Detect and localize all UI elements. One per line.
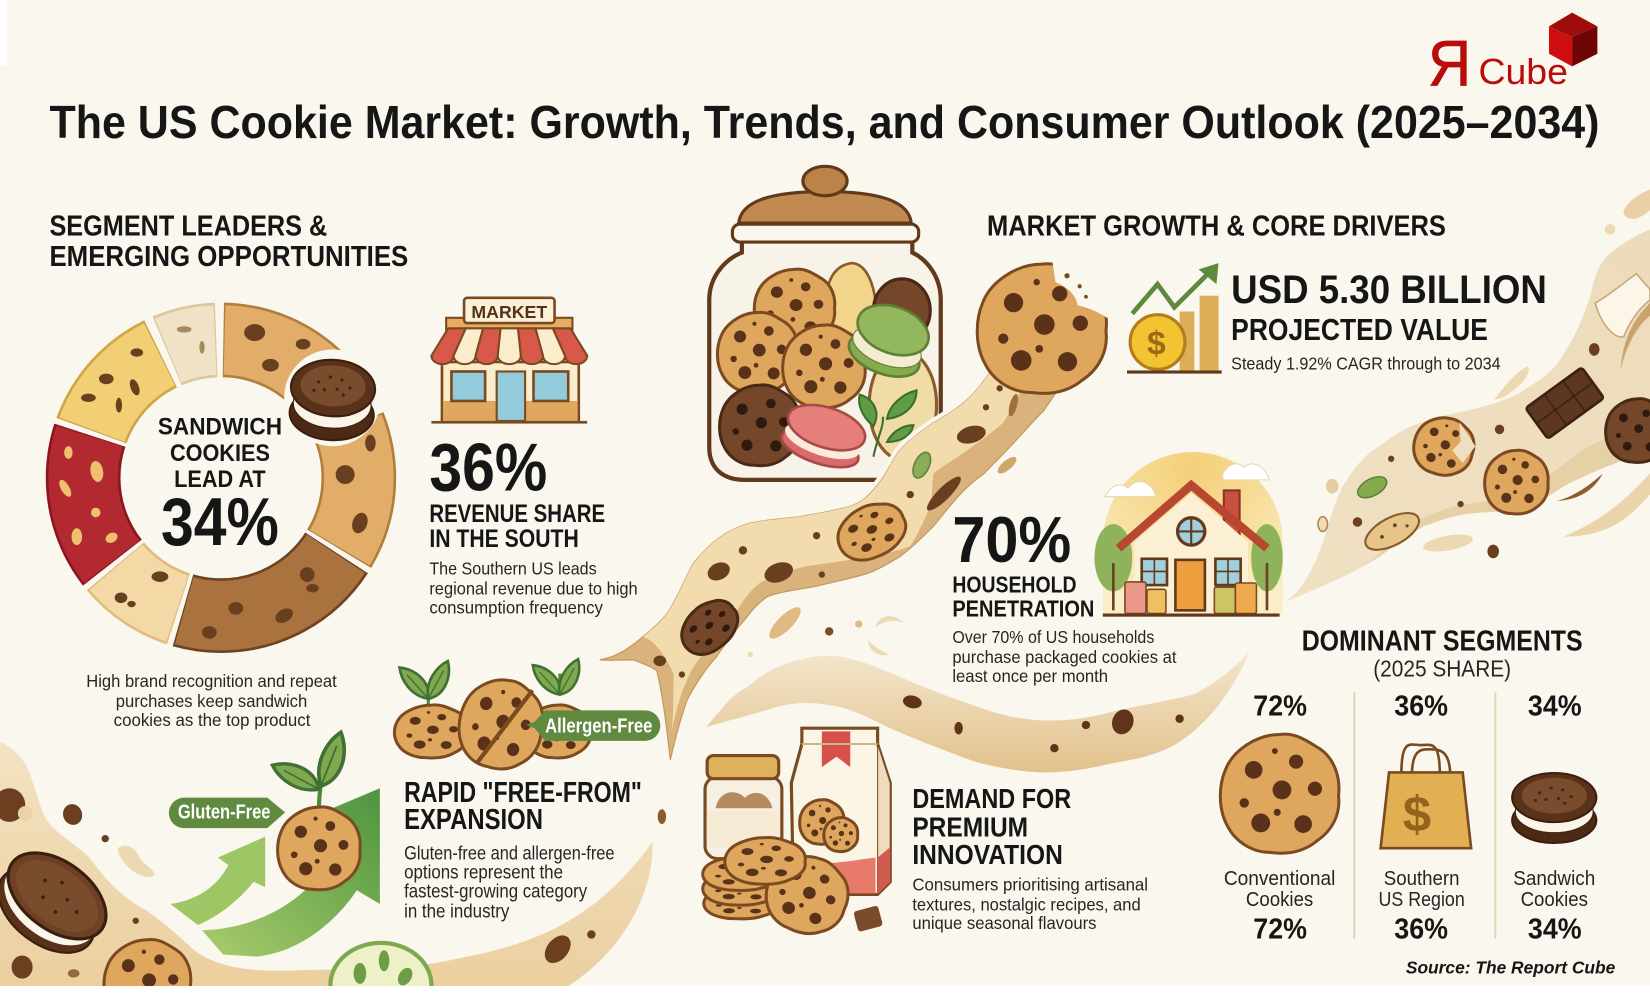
source note: Source: The Report Cube [1406,957,1615,977]
stat: 36 percent revenue share: The Southern US leads [429,559,597,579]
sprout [272,732,361,831]
text: premium innovation: DEMAND FOR [912,783,1071,814]
text: free-from expansion: options represent the [404,863,563,884]
icon: growth chart with coin: $ [1147,326,1166,363]
cookie in stream [829,494,914,569]
heading: DOMINANT SEGMENTS [1302,625,1583,657]
logo word: Cube [1478,52,1568,92]
white cream blob [1595,274,1650,337]
column: sandwich cookies [1512,691,1596,946]
cookie stack [703,838,858,944]
text: free-from expansion: Gluten-free and allergen-free [404,844,615,865]
column: southern US region: US Region [1379,889,1465,911]
text: premium innovation [912,783,1148,933]
central stream base [600,370,1060,760]
central stream halo [600,370,991,660]
stat: 36 percent revenue share [429,430,638,618]
column: sandwich cookies: Sandwich [1513,868,1595,890]
stat: household penetration: PENETRATION [952,596,1094,622]
green pistachio cookie [330,943,431,993]
text: free-from expansion: EXPANSION [404,804,543,836]
column: southern US region: Southern [1384,868,1460,890]
heading: segment leaders: SEGMENT LEADERS & [49,211,327,243]
green macaron [843,296,936,385]
text: premium innovation: textures, nostalgic recipes, and [912,894,1141,914]
stat: projected value: Steady 1.92% CAGR through to 2034 [1231,353,1501,373]
donut center label [158,414,282,560]
gluten-free pill: Gluten-Free [178,802,270,824]
market sign [464,298,555,323]
donut chips [81,324,376,639]
icon: cookie jar [709,166,941,480]
stat: projected value: PROJECTED VALUE [1231,313,1488,347]
icon: market store [431,298,587,424]
jar body [709,240,941,480]
icon: gluten-free growth arrows [169,732,380,957]
small jar [705,756,782,859]
stat: 36 percent revenue share: 36% [429,430,547,505]
chocolate piece [853,905,883,932]
icon: sandwich cookie on ring [284,349,381,446]
awning stripes [431,328,587,364]
donut chart: cookie segments [57,324,381,639]
column: southern US region: 36% [1394,691,1448,723]
donut center label: SANDWICH [158,414,282,441]
heading [1302,625,1583,682]
donut center label: 34% [161,485,279,560]
stat: projected value [1231,268,1547,373]
stream chips [1318,343,1599,558]
icon: house [1094,452,1283,617]
panel: dominant segments [1220,625,1596,946]
swoosh: right flowing stream with cookies [1285,189,1650,602]
central stream light inner [643,370,1023,733]
stat: 36 percent revenue share: REVENUE SHARE [429,500,605,528]
text: free-from expansion: in the industry [404,902,510,923]
icon: growth chart with coin [1127,263,1222,374]
text: premium innovation: PREMIUM [912,812,1028,843]
text: free-from expansion: fastest-growing category [404,882,588,903]
leaves [859,390,917,457]
icon: allergen-free cookies [394,659,660,775]
crumbled cookie [1360,506,1425,557]
central stream chips [653,385,1020,678]
green pistachio in stream [909,450,934,481]
stat: 36 percent revenue share: consumption frequency [429,598,603,618]
stat: household penetration: Over 70% of US households [952,627,1154,647]
donut nuts on red segment [57,446,119,545]
caption: donut: High brand recognition and repeat [86,671,337,691]
market sign: MARKET [471,302,547,322]
stat: household penetration: least once per month [952,666,1108,686]
column: southern US region: 36% [1394,914,1448,946]
paper bag [791,728,890,894]
gluten-free pill [169,798,285,828]
column: southern US region [1379,691,1471,946]
chocolate bar [1526,367,1604,439]
column: conventional cookies: 72% [1253,691,1307,723]
caption: donut [86,671,337,730]
right stream shape [1285,229,1650,602]
pale droplets [1422,224,1615,555]
donut center label: COOKIES [170,440,270,467]
allergen-free pill [526,710,660,741]
splash droplets [748,603,903,657]
logo cube [1549,13,1597,66]
column: conventional cookies: Conventional [1224,868,1335,890]
caption: donut: purchases keep sandwich [116,691,307,711]
logo mark: Я [1428,26,1471,99]
green pistachio [1354,472,1390,502]
column: conventional cookies: Cookies [1246,889,1313,911]
column: sandwich cookies: Cookies [1521,889,1588,911]
column: conventional cookies [1220,691,1339,946]
sandwich cookie [0,836,122,971]
donut center label: LEAD AT [174,466,266,493]
logo: RCube [1428,13,1597,99]
cookie bottom [104,939,191,993]
text: premium innovation: unique seasonal flavours [912,913,1097,933]
heading: segment leaders: EMERGING OPPORTUNITIES [49,241,408,273]
stat: household penetration: 70% [952,503,1071,576]
stat: household penetration [952,503,1176,686]
icon: premium products [703,728,890,944]
stat: projected value: USD 5.30 BILLION [1231,268,1547,312]
dark cookie in stream [671,590,747,664]
stat: 36 percent revenue share: regional revenue due to high [429,579,638,599]
text: free-from expansion [404,777,642,923]
column: southern US region: $ [1403,785,1431,842]
text: premium innovation: INNOVATION [912,839,1063,870]
stat: household penetration: HOUSEHOLD [952,571,1076,597]
chips [0,788,666,979]
swoosh: bottom-left stream [0,742,666,993]
jar contents [717,263,937,475]
cookie [278,807,360,890]
column: conventional cookies: 72% [1253,914,1307,946]
bitten cookie in stream [1408,411,1480,482]
column: sandwich cookies: 34% [1528,914,1582,946]
bitten cookie [977,244,1134,393]
swoosh: central stream from bitten cookie [600,244,1134,760]
text: premium innovation: Consumers prioritising artisanal [912,874,1148,894]
caption: donut: cookies as the top product [114,710,310,730]
text: free-from expansion: RAPID "FREE-FROM" [404,777,642,809]
darker lower band of right stream [1364,421,1650,566]
column: sandwich cookies: 34% [1528,691,1582,723]
heading: market growth: MARKET GROWTH & CORE DRIVERS [987,211,1446,243]
dark cookie at right edge [1606,399,1650,462]
swoosh: lower middle wave [706,652,1249,772]
allergen-free pill: Allergen-Free [545,715,652,737]
wave shape [706,652,1249,772]
heading: segment leaders [49,211,408,273]
jar lid [732,166,919,242]
pale blob [118,846,155,877]
cookie in stream [1485,450,1548,514]
heading: (2025 SHARE) [1373,656,1511,682]
stat: 36 percent revenue share: IN THE SOUTH [429,525,579,553]
wave chips [902,694,1184,752]
stat: household penetration: purchase packaged cookies at [952,647,1176,667]
pink macaron [777,396,871,475]
bottom stream shape [0,742,653,986]
